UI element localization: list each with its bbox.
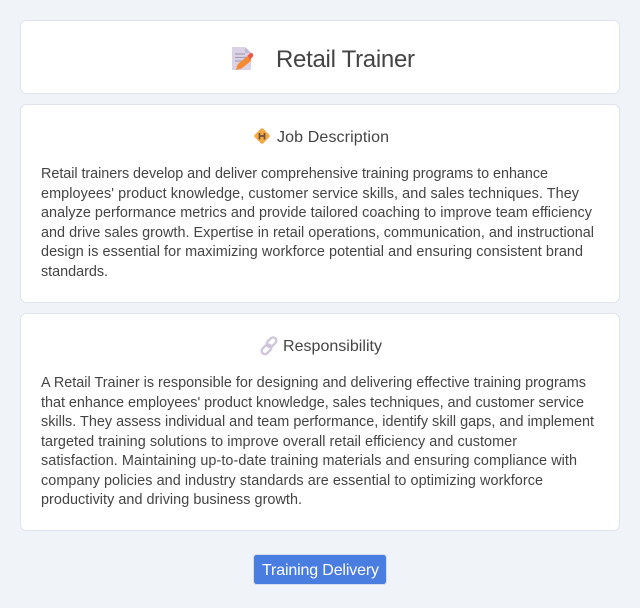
panel: title [20, 20, 620, 94]
panel: responsibility [20, 314, 620, 530]
heading: Retail Trainer: Retail Trainer [276, 46, 415, 73]
text block: job description: design is essential for maximizing workforce potential and ensuring consistent brand [41, 244, 583, 260]
text block: job description: employees' product knowledge, customer service skills, and sales techniques. They [41, 186, 580, 202]
panel: job description [20, 104, 620, 302]
text block: job description: Retail trainers develop and deliver comprehensive training programs to enhance [41, 166, 548, 182]
icon: memo with pencil [232, 47, 253, 70]
text block: responsibility: skills. They assess individual and team performance, identify skill gaps, and implement [41, 414, 594, 430]
text block: responsibility: A Retail Trainer is responsible for designing and delivering effective training programs [41, 375, 586, 391]
text block: responsibility: company policies and industry standards are essential to optimizing workforce [41, 473, 543, 489]
text block: responsibility: that enhance employees' product knowledge, sales techniques, and customer service [41, 395, 584, 411]
text block: responsibility: satisfaction. Maintaining up-to-date training materials and ensuring compliance with [41, 453, 577, 469]
heading: Responsibility: Responsibility [283, 338, 382, 355]
icon: link [260, 336, 278, 355]
text block: responsibility: targeted training solutions to improve overall retail efficiency and customer [41, 434, 517, 450]
button: Training Delivery [254, 554, 386, 584]
text block: job description: analyze performance metrics and provide tailored coaching to improve team efficiency [41, 205, 593, 221]
text block: responsibility [41, 375, 594, 508]
text block: responsibility: productivity and driving business growth. [41, 492, 302, 508]
text block: job description [41, 166, 594, 280]
text block: job description: and drive sales growth. Expertise in retail operations, communication, and instructional [41, 225, 594, 241]
icon: orange diamond sign [254, 128, 270, 144]
text block: job description: standards. [41, 264, 108, 280]
button: Training Delivery: Training Delivery [262, 562, 379, 579]
heading: Job Description: Job Description [277, 129, 389, 146]
